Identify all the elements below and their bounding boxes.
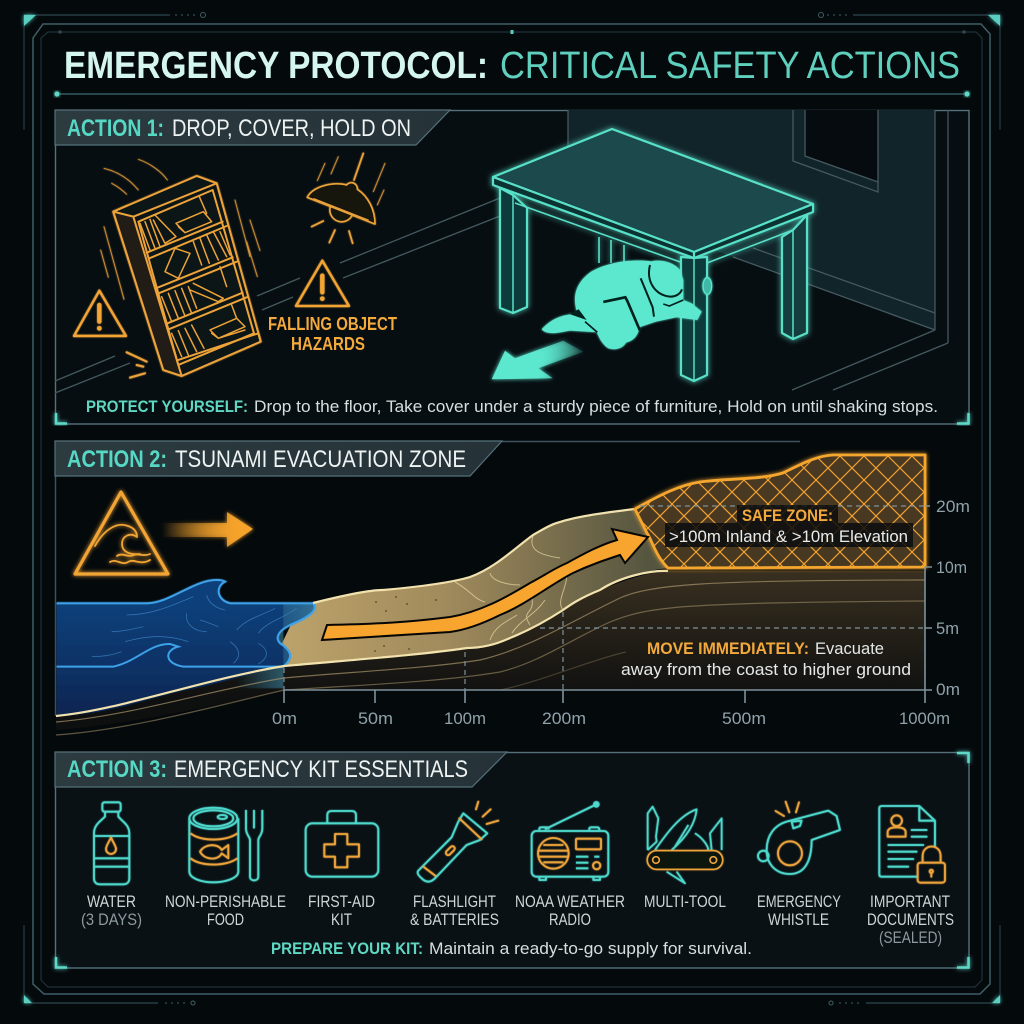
- kit item labels: DOCUMENTS: [867, 911, 954, 929]
- arrow: inland direction: [162, 512, 253, 547]
- axis labels: [272, 497, 970, 728]
- safe zone label: >100m Inland & >10m Elevation: [669, 527, 908, 546]
- axis labels: 50m: [358, 709, 393, 728]
- icon: multi-tool: [647, 807, 723, 883]
- panel 2 header: [55, 441, 502, 476]
- move immediately instruction: MOVE IMMEDIATELY:: [647, 639, 809, 658]
- safe zone area: [635, 455, 925, 568]
- title: [64, 45, 960, 87]
- water with waves: [57, 580, 315, 716]
- prepare your kit instruction: Maintain a ready-to-go supply for survival.: [429, 939, 752, 958]
- kit item labels: NON-PERISHABLE: [165, 893, 286, 911]
- kit item labels: (3 DAYS): [81, 911, 142, 929]
- kit item labels: FIRST-AID: [308, 893, 375, 911]
- axis labels: 0m: [272, 709, 297, 728]
- panel 3 header: [55, 752, 507, 787]
- kit item labels: WATER: [87, 893, 136, 911]
- sand texture and contours: [374, 536, 567, 652]
- panel 2 header: ACTION 2:: [67, 446, 167, 473]
- hazard label: [268, 314, 397, 354]
- axis labels: 20m: [936, 497, 970, 516]
- icon: first aid kit: [306, 811, 378, 877]
- panel 3 header: EMERGENCY KIT ESSENTIALS: [174, 756, 468, 783]
- icon: canned food and fork: [189, 808, 262, 882]
- ground strata lines: [56, 580, 925, 735]
- corner brackets panel 3: [56, 753, 968, 968]
- land outline: [56, 509, 668, 716]
- evacuation route arrow: [322, 529, 648, 640]
- kit item labels: FLASHLIGHT: [413, 893, 496, 911]
- kit item labels: FOOD: [207, 911, 244, 929]
- arrow: drop down direction: [492, 341, 583, 379]
- prepare your kit instruction: [271, 939, 752, 958]
- subsurface ground: [56, 571, 925, 730]
- title: EMERGENCY PROTOCOL:: [64, 45, 488, 87]
- icon: warning triangle left: [74, 291, 126, 336]
- icon: emergency whistle: [758, 802, 840, 874]
- icon: warning triangle hazards: [296, 261, 349, 306]
- kit item labels: NOAA WEATHER: [515, 893, 625, 911]
- kit item labels: (SEALED): [879, 929, 942, 947]
- icon: flashlight: [418, 802, 498, 882]
- icon: water bottle: [94, 802, 129, 884]
- protect yourself instruction: PROTECT YOURSELF:: [86, 397, 248, 416]
- kit item labels: & BATTERIES: [410, 911, 499, 929]
- title divider rule: [54, 91, 970, 97]
- panel: action 2 tsunami evacuation zone: [55, 441, 970, 735]
- kit item labels: WHISTLE: [768, 911, 829, 929]
- kit item labels: RADIO: [549, 911, 591, 929]
- axis labels: 0m: [936, 680, 960, 699]
- icon: weather radio: [532, 802, 608, 880]
- safe zone label: SAFE ZONE:: [742, 506, 833, 525]
- axis labels: 1000m: [899, 709, 950, 728]
- kit item labels: IMPORTANT: [870, 893, 950, 911]
- icon: sealed documents: [879, 806, 945, 883]
- icon: falling ceiling lamp: [307, 153, 385, 243]
- panel: action 1 drop cover hold on: [55, 110, 969, 424]
- axis labels: 5m: [936, 619, 959, 638]
- axis labels: 10m: [936, 558, 967, 577]
- hazard label: FALLING OBJECT: [268, 314, 397, 334]
- protect yourself instruction: Drop to the floor, Take cover under a sturdy piece of furniture, Hold on until shaking stops.: [254, 397, 938, 416]
- kit item labels: MULTI-TOOL: [644, 893, 726, 911]
- panel 1 header: DROP, COVER, HOLD ON: [172, 115, 411, 142]
- hazard label: HAZARDS: [291, 334, 365, 354]
- move immediately instruction: Evacuate: [815, 639, 884, 658]
- panel 2 header: TSUNAMI EVACUATION ZONE: [175, 446, 466, 473]
- icon: tsunami warning triangle: [75, 492, 168, 574]
- kit item labels: EMERGENCY: [757, 893, 841, 911]
- person in drop cover hold position: [542, 261, 712, 349]
- sand slope: [270, 509, 668, 668]
- panel 1 header: [55, 110, 450, 145]
- room: wall and floor lines: [55, 110, 948, 393]
- safe zone label: [665, 505, 913, 547]
- axis labels: 100m: [444, 709, 486, 728]
- panel: action 3 emergency kit essentials: [55, 752, 969, 968]
- axis labels: 500m: [722, 709, 766, 728]
- icon: tilting bookcase: [101, 159, 261, 378]
- table: [493, 129, 813, 381]
- corner brackets panel 1: [56, 413, 968, 424]
- axes and gridlines: [284, 506, 932, 703]
- panel 1 header: ACTION 1:: [67, 115, 164, 142]
- move immediately instruction: away from the coast to higher ground: [621, 660, 911, 679]
- axis labels: 200m: [542, 709, 586, 728]
- panel 3 header: ACTION 3:: [67, 756, 167, 783]
- kit item labels: [81, 893, 954, 947]
- title: CRITICAL SAFETY ACTIONS: [500, 45, 960, 87]
- kit item labels: KIT: [331, 911, 352, 929]
- prepare your kit instruction: PREPARE YOUR KIT:: [271, 939, 423, 958]
- move immediately instruction: [621, 639, 911, 679]
